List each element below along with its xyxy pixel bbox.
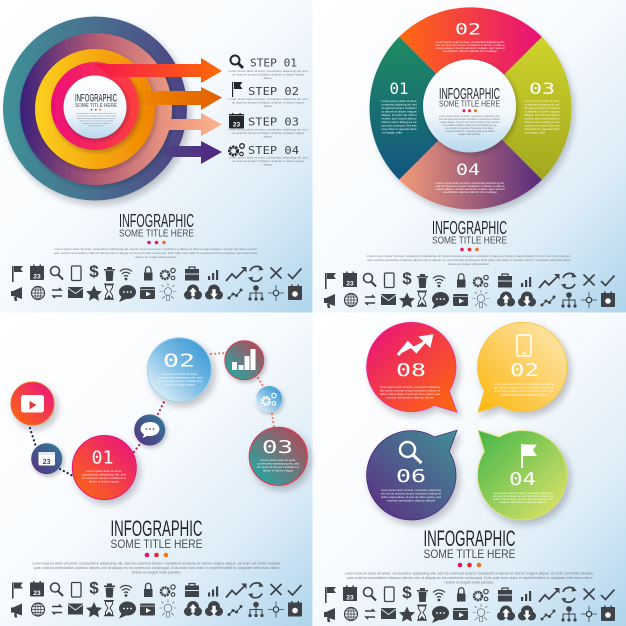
bubble: step 08: Lorem ipsum dolor sit amet, consectetur adipiscing bbox=[380, 385, 440, 389]
segment 01 bbox=[370, 37, 470, 180]
segment 04 text: sed do eiusmod tempor incididunt ut labore et dolore bbox=[436, 184, 505, 188]
bubble: step 08: dolore magna aliqua. Ut enim ad minim veniam, quis bbox=[380, 392, 440, 396]
bubble: step 06: dolore magna aliqua. Ut enim ad minim veniam, quis bbox=[381, 495, 441, 499]
segment 04 bbox=[399, 108, 542, 209]
bubble: step 02: elit, sed do eiusmod tempor incididunt ut labore et bbox=[494, 386, 554, 390]
heading: top-right: SOME TITLE HERE bbox=[432, 236, 507, 246]
bubble: step 04: 04 bbox=[509, 469, 536, 490]
bubble: step 06: 06 bbox=[396, 466, 426, 487]
step 1 label: Lorem ipsum dolor sit amet, consectetur adipiscing elit, sed bbox=[228, 69, 308, 73]
heading: bottom-left: SOME TITLE HERE bbox=[110, 537, 202, 551]
pink ring bbox=[51, 62, 139, 150]
segment 03 text: veniam, quis nostrud ullamco bbox=[524, 116, 560, 120]
segment 03 text: eu fugiat nulla bbox=[525, 130, 545, 134]
circle: step 01: 01 bbox=[92, 448, 114, 468]
heading: top-left: SOME TITLE HERE bbox=[119, 228, 194, 240]
step 3 label: Lorem ipsum dolor sit amet, consectetur adipiscing elit, sed bbox=[228, 128, 308, 132]
heading: bottom-left: Lorem ipsum dolor sit amet, consectetur adipiscing elit, sed do eiusmod tempor incididunt ut labore et dolore magna aliqua. Ut enim ad minim veniam, bbox=[32, 562, 281, 566]
segment 04 text bbox=[436, 160, 505, 194]
circle: calendar bbox=[31, 443, 62, 474]
panel: concentric circles with step arrows bbox=[3, 16, 308, 302]
segment 02 text: exercitation ullamco laboris nisi ut aliquip bbox=[443, 49, 497, 53]
heading: top-left bbox=[54, 211, 259, 259]
step 3 label: do eiusmod tempor incididunt ut labore et dolore magna bbox=[232, 131, 304, 135]
icon: magnifier bbox=[230, 56, 243, 68]
segment 04 text: exercitation ullamco laboris nisi ut aliquip bbox=[443, 190, 497, 194]
segment 04 text: Lorem ipsum dolor sit amet, consectetur adipiscing elit, bbox=[436, 181, 505, 185]
step 3 label: STEP 03 bbox=[248, 116, 299, 128]
heading: top-right bbox=[367, 218, 572, 266]
dotted connector: navy bbox=[30, 428, 73, 476]
icon: gears bbox=[230, 144, 244, 156]
segment 01 text: eu fugiat nulla bbox=[382, 130, 402, 134]
heading: top-left: quis nostrud exercitation ullamco laboris nisi ut aliquip ex ea commodo consequat. Duis aute irure dolor in reprehenderit in voluptate velit esse cillum bbox=[54, 251, 259, 255]
step 4 label: aliqua. bbox=[264, 162, 273, 166]
heading: bottom-right: INFOGRAPHIC bbox=[424, 526, 516, 551]
centre title: SOME TITLE HERE bbox=[75, 103, 117, 109]
circle: chat bbox=[134, 414, 165, 446]
segment 03 bbox=[470, 37, 571, 180]
heading: bottom-right: Lorem ipsum dolor sit amet, consectetur adipiscing elit, sed do eiusmod tempor incididunt ut labore et dolore magna aliqua. Ut enim ad minim veniam, bbox=[345, 572, 594, 576]
segment 02 bbox=[399, 7, 542, 108]
icon: phone bbox=[517, 335, 531, 356]
circle: step 01: consectetur adipiscing elit, sed bbox=[82, 472, 126, 476]
bubble: step 02: nostrud exercitation ullamco laboris bbox=[500, 392, 549, 396]
centre title: INFOGRAPHIC bbox=[75, 92, 117, 104]
circle: step 01: do eiusmod tempor incididunt ut bbox=[82, 476, 126, 480]
segment 03 text: consectetur adipiscing elit, sed bbox=[524, 102, 560, 106]
centre title: consequat. Duis aute irure dolor in bbox=[82, 122, 110, 125]
circle: step 03: do eiusmod tempor incididunt ut bbox=[257, 465, 299, 469]
step 3 label bbox=[228, 113, 308, 138]
bubble: step 06: nostrud exercitation ullamco laboris bbox=[387, 498, 436, 502]
step 2 label bbox=[228, 82, 308, 108]
bubble: step 02: Lorem ipsum dolor sit amet, consectetur adipiscing bbox=[494, 382, 554, 386]
centre title: commodo consequat. Duis aute irure dolor bbox=[446, 126, 494, 130]
segment 02 text bbox=[436, 20, 505, 53]
circle: step 01: labore et dolore magna bbox=[89, 480, 119, 484]
bubble: step 04: Lorem ipsum dolor sit amet, consectetur adipiscing bbox=[493, 491, 553, 495]
circle: step 03: 03 bbox=[262, 437, 293, 458]
arrow: step 4 bbox=[165, 141, 222, 164]
bubble: step 06: Lorem ipsum dolor sit amet, consectetur adipiscing bbox=[381, 488, 441, 492]
heading: top-right: INFOGRAPHIC bbox=[432, 218, 507, 238]
icon: magnifier bbox=[400, 442, 422, 463]
panel: speech bubbles bbox=[324, 322, 615, 623]
circle: video bbox=[11, 382, 54, 425]
panel: top-right backdrop bbox=[314, 0, 626, 312]
step 2 label: Lorem ipsum dolor sit amet, consectetur adipiscing elit, sed bbox=[228, 97, 308, 101]
heading: top-right: Lorem ipsum dolor sit amet, consectetur adipiscing elit, sed do eiusmod tempor incididunt ut labore et dolore magna aliqua. Ut enim ad minim veniam, bbox=[367, 254, 571, 258]
heading: top-left: dolore eu fugiat nulla pariatur. bbox=[135, 255, 177, 259]
segment 02 text: 02 bbox=[455, 20, 481, 38]
circle: step 02: 02 bbox=[163, 350, 195, 372]
bubble: step 08: 08 bbox=[396, 360, 426, 381]
pie shadow disc bbox=[370, 8, 570, 208]
segment 01 text: aliqua. Ut enim ad minim bbox=[382, 113, 417, 117]
heading: top-left: Lorem ipsum dolor sit amet, consectetur adipiscing elit, sed do eiusmod tempor incididunt ut labore et dolore magna aliqua. Ut enim ad minim veniam, bbox=[54, 247, 258, 251]
step 2 label: do eiusmod tempor incididunt ut labore et dolore magna bbox=[232, 100, 304, 104]
centre title: exercitation ullamco laboris nisi ut aliquip ex ea bbox=[442, 123, 497, 127]
heading: bottom-left bbox=[32, 516, 281, 574]
heading: bottom-left: quis nostrud exercitation ullamco laboris nisi ut aliquip ex ea commodo consequat. Duis aute irure dolor in reprehenderit in voluptate velit esse cillum bbox=[34, 566, 280, 570]
bubble: step 04 bbox=[478, 430, 567, 520]
circle: step 02 bbox=[147, 338, 211, 402]
icon set: top-left bbox=[11, 262, 302, 302]
segment 02 text: Lorem ipsum dolor sit amet, consectetur adipiscing elit, bbox=[436, 40, 505, 44]
heading: bottom-right: SOME TITLE HERE bbox=[424, 547, 516, 561]
bubble: step 02 bbox=[478, 322, 567, 412]
segment 02 text: magna aliqua. Ut enim ad minim veniam, quis nostrud bbox=[436, 46, 505, 50]
segment 03 text: commodo consequat. Duis aute bbox=[524, 124, 560, 128]
centre title bbox=[439, 86, 500, 136]
segment 01 text bbox=[382, 79, 417, 134]
heading: top-right: quis nostrud exercitation ullamco laboris nisi ut aliquip ex ea commodo consequat. Duis aute irure dolor in reprehenderit in voluptate velit esse cillum bbox=[367, 258, 572, 262]
step 3 label: aliqua. bbox=[264, 134, 273, 138]
centre title: in reprehenderit in voluptate velit esse cillum bbox=[444, 129, 495, 133]
heading: bottom-right: dolore eu fugiat nulla pariatur. bbox=[444, 580, 495, 584]
centre title: reprehenderit in bbox=[88, 124, 104, 128]
step 2 label: aliqua. bbox=[264, 104, 273, 108]
dotted connector: red bbox=[134, 400, 165, 452]
arrow: step 3 bbox=[150, 113, 222, 136]
heading: bottom-right: quis nostrud exercitation ullamco laboris nisi ut aliquip ex ea commodo consequat. Duis aute irure dolor in reprehenderit in voluptate velit esse cillum bbox=[346, 576, 593, 580]
icon: flag bbox=[521, 444, 537, 468]
segment 03 text: ut labore et dolore magna bbox=[524, 110, 560, 114]
circle: step 03 bbox=[249, 427, 307, 485]
segment 03 text: aliqua. Ut enim ad minim bbox=[524, 113, 560, 117]
heading: bottom-right bbox=[345, 526, 594, 584]
segment 02 text: sed do eiusmod tempor incididunt ut labore et dolore bbox=[436, 43, 505, 47]
segment 04 text: 04 bbox=[456, 160, 480, 179]
step 4 label bbox=[228, 144, 308, 166]
step 4 label: do eiusmod tempor incididunt ut labore et dolore magna bbox=[232, 159, 304, 163]
centre title: aliqua. Ut enim ad minim veniam, quis nostrud exercitation bbox=[77, 117, 115, 120]
centre title: SOME TITLE HERE bbox=[439, 100, 500, 109]
circle: step 01 bbox=[72, 436, 136, 500]
centre title: INFOGRAPHIC bbox=[439, 86, 500, 103]
icon set: bottom-left bbox=[11, 578, 302, 618]
heading: top-right: dolore eu fugiat nulla pariatur. bbox=[448, 262, 490, 266]
centre disc bbox=[423, 60, 516, 152]
icon: trend arrow bbox=[398, 336, 432, 355]
outer teal ring bbox=[3, 16, 187, 200]
arrow: step 2 bbox=[140, 87, 222, 110]
circle: step 02: labore et dolore magna bbox=[165, 382, 195, 386]
icon: flag bbox=[232, 82, 242, 97]
bubble: step 04: nostrud exercitation ullamco laboris bbox=[499, 500, 548, 504]
step 1 label: STEP 01 bbox=[250, 56, 297, 70]
segment 03 text: do eiusmod tempor incididunt bbox=[524, 106, 560, 110]
circle: step 03: labore et dolore magna bbox=[263, 468, 293, 472]
bubble: step 08: elit, sed do eiusmod tempor incididunt ut labore et bbox=[380, 388, 440, 392]
centre title: Lorem ipsum dolor sit amet, consectetur adipiscing elit, sed bbox=[76, 112, 116, 115]
centre title: Lorem ipsum dolor sit amet, consectetur adipiscing elit, bbox=[439, 114, 500, 118]
segment 03 text bbox=[524, 79, 560, 134]
circle: step 01: Lorem ipsum dolor sit amet, bbox=[86, 469, 122, 473]
centre title bbox=[75, 92, 117, 128]
panel: top-left backdrop bbox=[0, 0, 312, 312]
circle: step 02: Lorem ipsum dolor sit amet, bbox=[162, 372, 198, 376]
heading: top-left: INFOGRAPHIC bbox=[119, 211, 194, 231]
segment 01 text: Lorem ipsum dolor sit amet bbox=[382, 99, 417, 103]
circle: step 02: do eiusmod tempor incididunt ut bbox=[158, 379, 202, 383]
icon: calendar: 23 bbox=[43, 459, 51, 466]
yellow to orange ring bbox=[35, 49, 155, 169]
centre title: fugiat nulla pariatur bbox=[458, 132, 480, 136]
icon: gears bbox=[262, 393, 276, 405]
icon set: bottom-right bbox=[324, 583, 615, 623]
segment 01 text: 01 bbox=[390, 79, 408, 98]
panel: four-part pie bbox=[324, 7, 615, 309]
bubble: step 08 bbox=[367, 322, 457, 412]
bubble: step 06: elit, sed do eiusmod tempor incididunt ut labore et bbox=[381, 492, 441, 496]
bubble: step 06 bbox=[367, 430, 457, 520]
segment 01 text: veniam, quis nostrud ullamco bbox=[382, 116, 417, 120]
segment 04 text: magna aliqua. Ut enim ad minim veniam, quis nostrud bbox=[436, 187, 505, 191]
heading: bottom-left: INFOGRAPHIC bbox=[110, 516, 203, 541]
centre white disc bbox=[64, 76, 126, 138]
circle: step 02: consectetur adipiscing elit, sed bbox=[158, 376, 202, 380]
step 1 label bbox=[228, 56, 308, 80]
step 1 label: do eiusmod tempor incididunt ut labore et dolore magna bbox=[232, 72, 304, 76]
icon set: top-right bbox=[324, 269, 615, 309]
step 2 label: STEP 02 bbox=[248, 85, 299, 98]
step 4 label: STEP 04 bbox=[248, 144, 299, 157]
bubble: step 04: elit, sed do eiusmod tempor incididunt ut labore et bbox=[493, 494, 553, 498]
circle: step 03: Lorem ipsum dolor sit amet, bbox=[260, 458, 296, 462]
segment 01 text: laboris nisi ut aliquip ex ea bbox=[382, 120, 417, 124]
icon: calendar: 23 bbox=[233, 122, 240, 128]
segment 01 text: do eiusmod tempor incididunt bbox=[382, 106, 417, 110]
step 1 label: aliqua. bbox=[264, 76, 273, 80]
bubble: step 02: dolore magna aliqua. Ut enim ad minim veniam, quis bbox=[494, 389, 554, 393]
step 4 label: Lorem ipsum dolor sit amet, consectetur adipiscing elit, sed bbox=[228, 156, 308, 160]
circle: step 03: consectetur adipiscing elit, sed bbox=[257, 462, 299, 466]
segment 03 text: laboris nisi ut aliquip ex ea bbox=[524, 120, 560, 124]
icon: speech bubble bbox=[140, 422, 160, 438]
icon: video window bbox=[21, 395, 44, 412]
circle: gears bbox=[256, 386, 282, 412]
centre title: ullamco laboris nisi ut aliquip ex ea commodo bbox=[79, 120, 114, 122]
bubble: step 04: dolore magna aliqua. Ut enim ad minim veniam, quis bbox=[493, 497, 553, 501]
icon: bars bbox=[232, 349, 256, 370]
centre title: sed do eiusmod tempor incididunt ut labore et dolore bbox=[439, 117, 500, 121]
segment 01 text: consectetur adipiscing elit, sed bbox=[382, 102, 417, 106]
panel: bottom-right backdrop bbox=[314, 314, 626, 626]
panel: bottom-left backdrop bbox=[0, 314, 312, 626]
centre title: do eiusmod tempor incididunt ut labore et dolore magna bbox=[76, 114, 117, 118]
bubble: step 08: nostrud exercitation ullamco laboris bbox=[386, 396, 435, 400]
purple to salmon ring bbox=[20, 33, 172, 185]
heading: bottom-left: dolore eu fugiat nulla pariatur. bbox=[132, 570, 182, 574]
segment 01 text: commodo consequat. Duis aute bbox=[382, 124, 417, 128]
centre title: magna aliqua. Ut enim ad minim veniam, quis nostrud bbox=[440, 120, 500, 124]
panel: connected circles timeline bbox=[11, 338, 307, 618]
segment 03 text: 03 bbox=[529, 79, 555, 98]
segment 01 text: irure dolor in reprehenderit bbox=[382, 127, 417, 131]
circle: bar chart bbox=[225, 341, 264, 380]
segment 01 text: ut labore et dolore magna bbox=[382, 110, 417, 114]
segment 03 text: irure dolor in reprehenderit bbox=[524, 127, 560, 131]
dotted connector: salmon bbox=[211, 353, 274, 427]
segment 03 text: Lorem ipsum dolor sit amet bbox=[524, 99, 560, 103]
arrow: step 1 bbox=[95, 58, 222, 83]
bubble: step 02: 02 bbox=[510, 360, 539, 381]
